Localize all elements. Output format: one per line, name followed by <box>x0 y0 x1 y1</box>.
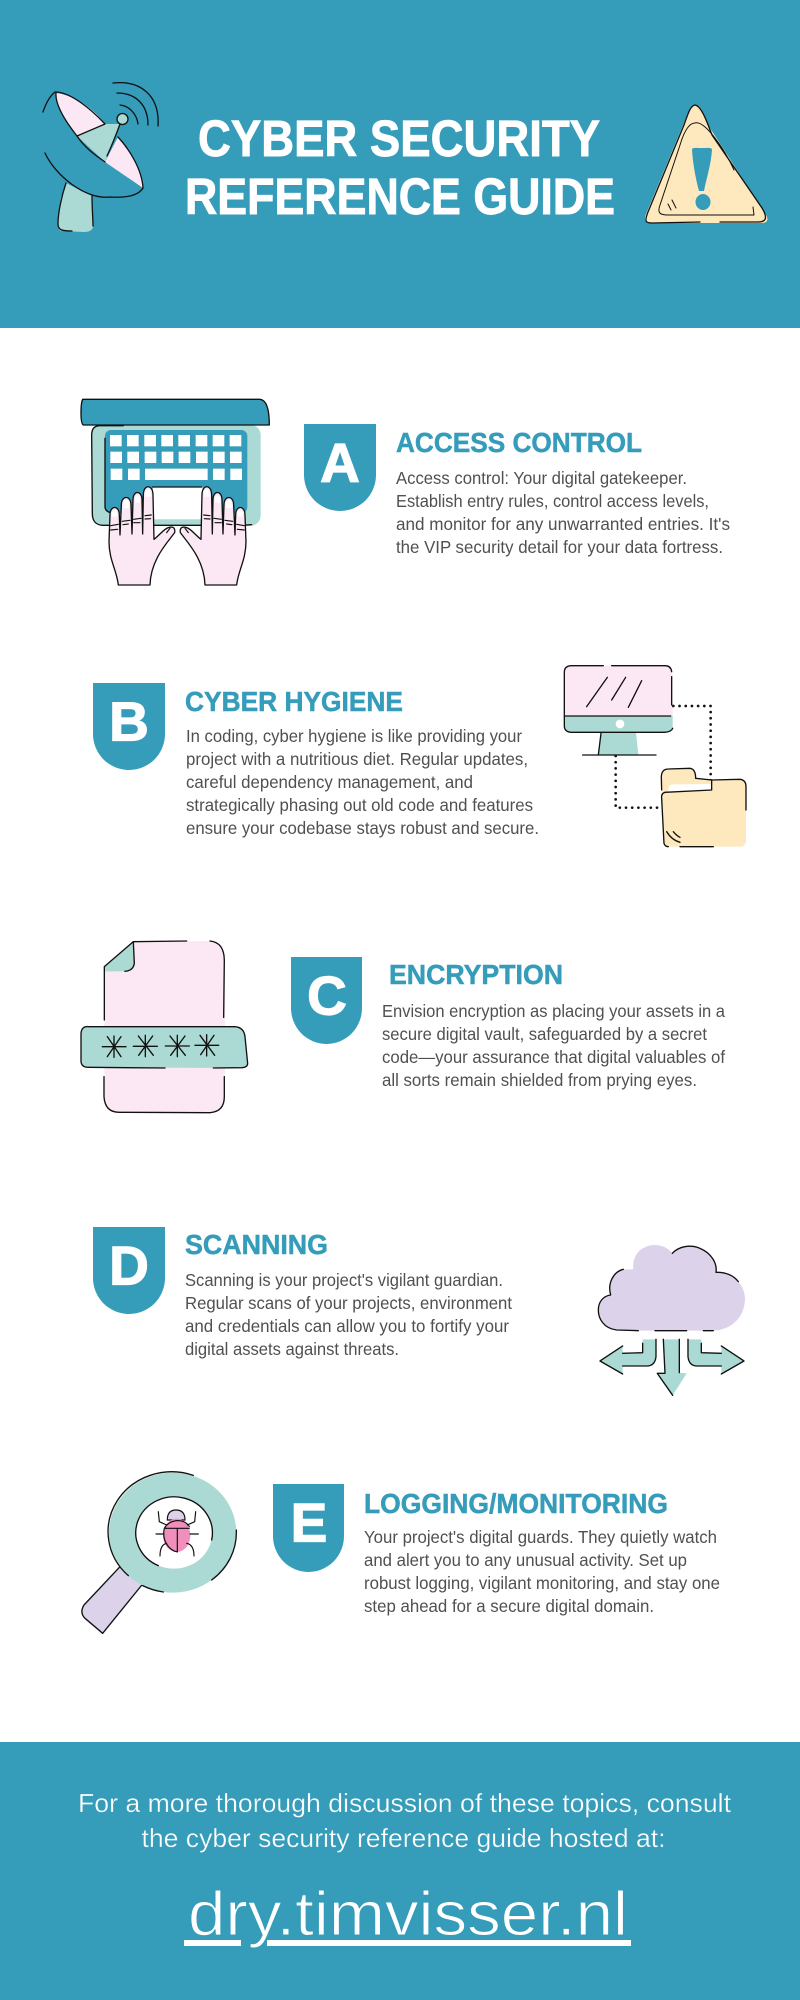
badge C <box>291 957 362 1044</box>
text: logging body: robust logging, vigilant monitoring, and stay one <box>364 1573 720 1593</box>
text: access control body: and monitor for any unwarranted entries. It's <box>396 514 730 534</box>
text: logging body: step ahead for a secure digital domain. <box>364 1596 654 1616</box>
text: encryption body: code—your assurance that digital valuables of <box>382 1047 725 1067</box>
text: access control body: Access control: Your digital gatekeeper. <box>396 468 687 488</box>
right hand <box>180 487 246 585</box>
text: scanning body <box>185 1270 512 1359</box>
icon: cloud with arrows <box>598 1245 745 1395</box>
title: REFERENCE GUIDE <box>185 168 615 225</box>
text: cyber hygiene body <box>186 726 539 838</box>
bug <box>156 1510 198 1556</box>
link: url: dry.timvisser.nl <box>188 1880 628 1949</box>
panel: encryption <box>81 941 725 1113</box>
panel: scanning <box>93 1227 745 1395</box>
title: CYBER SECURITY <box>198 110 600 167</box>
badge D <box>93 1227 165 1314</box>
text: access control body: the VIP security detail for your data fortress. <box>396 537 723 557</box>
text: footer note <box>78 1788 732 1853</box>
badge D: D <box>109 1234 149 1296</box>
heading: logging/monitoring: LOGGING/MONITORING <box>364 1488 668 1519</box>
text: logging body: and alert you to any unusual activity. Set up <box>364 1550 687 1570</box>
panel: header banner <box>0 0 800 328</box>
heading: access control: ACCESS CONTROL <box>396 427 642 458</box>
panel: cyber hygiene <box>93 666 746 847</box>
keyboard keys <box>110 435 242 519</box>
text: footer note: the cyber security reference guide hosted at: <box>142 1823 666 1853</box>
icon: warning triangle <box>645 105 767 223</box>
text: cyber hygiene body: project with a nutritious diet. Regular updates, <box>186 749 528 769</box>
text: cyber hygiene body: In coding, cyber hygiene is like providing your <box>186 726 522 746</box>
text: scanning body: digital assets against threats. <box>185 1339 399 1359</box>
heading: cyber hygiene: CYBER HYGIENE <box>185 686 403 717</box>
text: scanning body: Scanning is your project's vigilant guardian. <box>185 1270 503 1290</box>
text: encryption body: all sorts remain shielded from prying eyes. <box>382 1070 697 1090</box>
text: encryption body: secure digital vault, safeguarded by a secret <box>382 1024 707 1044</box>
badge A: A <box>320 432 360 494</box>
icon: laptop with typing hands <box>81 399 269 585</box>
text: logging body: Your project's digital guards. They quietly watch <box>364 1527 717 1547</box>
icon: monitor linked to folder <box>564 666 746 847</box>
badge B <box>93 683 165 770</box>
icon: magnifier with bug <box>82 1472 236 1633</box>
text: encryption body <box>382 1001 725 1090</box>
title <box>185 110 615 225</box>
text: cyber hygiene body: strategically phasing out old code and features <box>186 795 533 815</box>
left hand <box>109 487 175 585</box>
text: cyber hygiene body: ensure your codebase stays robust and secure. <box>186 818 539 838</box>
badge E <box>273 1484 344 1572</box>
heading: scanning: SCANNING <box>185 1229 328 1260</box>
icon: password document <box>81 941 248 1113</box>
text: encryption body: Envision encryption as placing your assets in a <box>382 1001 725 1021</box>
badge A <box>304 424 376 511</box>
panel: access control <box>81 399 730 585</box>
text: access control body <box>396 468 730 557</box>
text: scanning body: Regular scans of your projects, environment <box>185 1293 512 1313</box>
icon: satellite dish <box>43 83 158 232</box>
text: scanning body: and credentials can allow you to fortify your <box>185 1316 509 1336</box>
badge E: E <box>291 1492 327 1554</box>
badge C: C <box>307 964 347 1026</box>
text: footer note: For a more thorough discussion of these topics, consult <box>78 1788 732 1818</box>
text: access control body: Establish entry rules, control access levels, <box>396 491 709 511</box>
asterisks <box>102 1035 219 1057</box>
text: cyber hygiene body: careful dependency management, and <box>186 772 473 792</box>
badge B: B <box>109 690 149 752</box>
text: logging body <box>364 1527 720 1616</box>
panel: logging and monitoring <box>82 1472 720 1633</box>
heading: encryption: ENCRYPTION <box>389 959 563 990</box>
panel: footer <box>0 1742 800 2000</box>
